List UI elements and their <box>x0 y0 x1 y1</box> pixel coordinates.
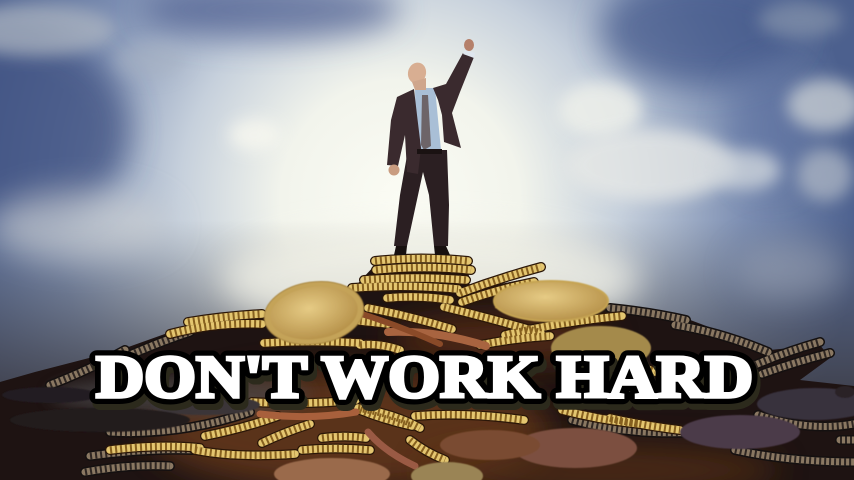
head <box>406 61 428 90</box>
title: DON'T WORK HARD: DON'T WORK HARD <box>96 344 753 410</box>
gold coin behind title <box>551 326 651 370</box>
jacket right <box>433 53 474 148</box>
jacket left <box>387 89 421 174</box>
pile base <box>0 265 854 480</box>
businessman raising fist <box>387 39 475 255</box>
belt <box>417 149 442 154</box>
legs <box>394 150 449 246</box>
title: DON'T WORK HARD: DON'T WORK HARD <box>99 350 756 416</box>
large gold coin left <box>260 275 368 351</box>
dark coin faces left <box>2 387 260 432</box>
shoes <box>394 246 450 255</box>
copper coins foreground <box>274 458 483 480</box>
coin pile <box>0 258 854 480</box>
copper coin edges <box>260 314 486 466</box>
hand left <box>388 164 400 176</box>
title: DON'T WORK HARD: DON'T WORK HARD <box>96 344 753 410</box>
large gold coin right <box>494 281 608 321</box>
silver coin edges <box>50 308 854 472</box>
clouds <box>0 2 854 300</box>
shirt <box>415 88 441 150</box>
dark coin faces right <box>440 386 854 468</box>
raised fist <box>464 39 474 51</box>
tie <box>421 95 431 150</box>
shirt cuff <box>463 50 475 58</box>
gold coin edges <box>110 258 680 460</box>
